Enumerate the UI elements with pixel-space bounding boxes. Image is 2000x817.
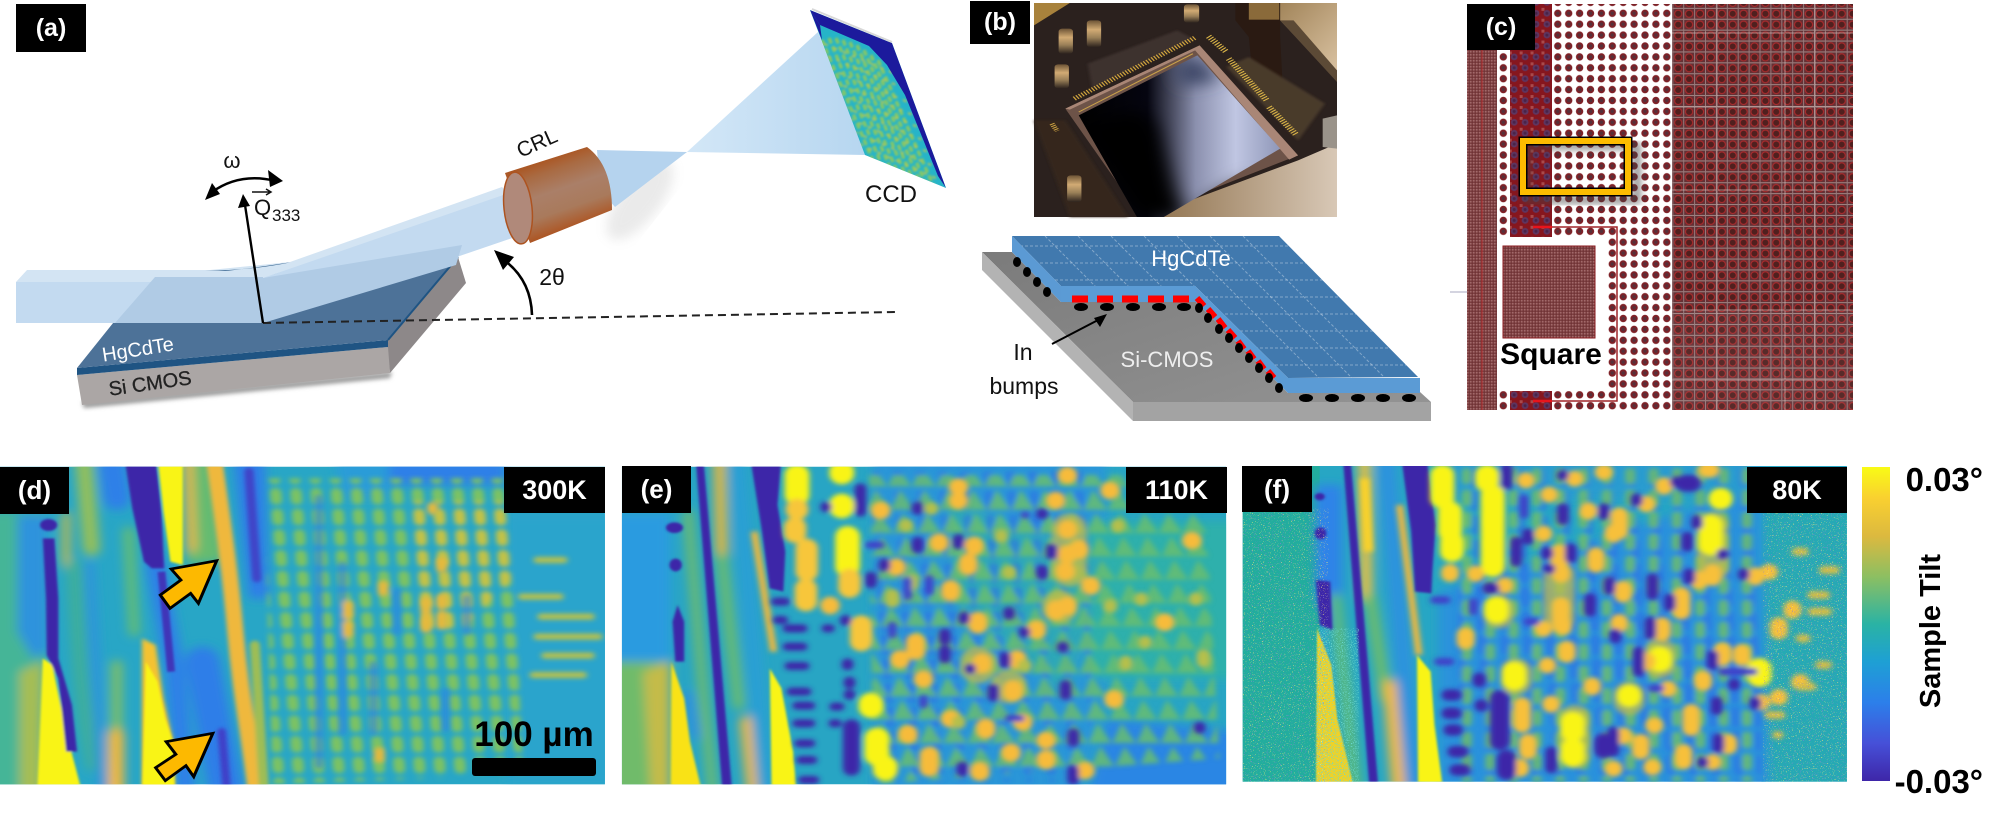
guide line [1450,291,1853,293]
CCD detector [810,9,946,208]
thin trace outline [1533,227,1617,401]
Q vector arrow: 333 [272,206,300,225]
panel c: bump layout [1450,4,1853,410]
panel b: flip-chip diagram [982,236,1431,421]
label (e): (e) [641,474,672,504]
indium bumps [1013,257,1416,402]
label (d) [0,467,69,514]
Q vector arrow: Q [254,195,271,220]
X-ray beam [16,32,866,323]
Si-CMOS substrate: Si-CMOS [1121,347,1213,372]
label (d): (d) [18,475,51,505]
label (f): (f) [1264,474,1290,504]
colorbar labels: Sample Tilt [1915,554,1947,708]
colorbar labels: 0.03° [1906,461,1983,498]
scale bar: 100 µm [472,715,596,776]
panel a: diffraction schematic [16,8,946,410]
red contacts right [1197,298,1274,378]
label 300K [504,467,605,513]
highlight rectangle [1523,141,1637,200]
omega rotation arrow [205,148,283,200]
In bumps callout: In [1013,339,1033,365]
label 300K: 300K [522,474,587,504]
label 110K: 110K [1145,474,1208,504]
panel b: detector photograph [1032,3,1337,219]
colorbar labels: -0.03° [1895,763,1983,800]
left stripes [1315,458,1444,798]
pixel noise [1243,508,1847,782]
label (b): (b) [984,8,1016,36]
hot and cold spots [1435,468,1835,772]
dashed axis [263,312,895,323]
dark and yellow features [37,458,183,798]
label (c): (c) [1486,12,1516,40]
label 80K: 80K [1772,474,1822,504]
label (a) [16,4,86,52]
In bumps callout: bumps [989,373,1059,399]
Q vector arrow [238,189,300,323]
label 110K [1126,467,1227,513]
red contacts [1072,296,1189,302]
map e: 110K tilt map [622,466,1226,784]
left dense stripe [1467,4,1497,410]
two-theta arrow: 2θ [539,264,565,290]
right dense array [1672,4,1853,410]
sample: HgCdTe on Si CMOS [77,257,466,408]
HgCdTe layer: HgCdTe [1151,246,1231,271]
In bumps callout [989,314,1107,399]
left stripes [666,458,797,798]
bump grid [1497,4,1672,410]
label (a): (a) [36,14,66,42]
map d: 300K tilt map [0,466,605,784]
HgCdTe layer [1012,236,1420,393]
scale bar: 100 µm: 100 µm [474,715,594,754]
square block: Square [1500,338,1602,371]
Si-CMOS substrate [982,252,1431,421]
label (e) [622,466,691,513]
CRL lens: CRL [513,124,561,163]
hot and cold spots [776,472,1204,780]
label 80K [1747,467,1847,513]
colorbar [1862,467,1890,781]
omega rotation arrow: ω [223,148,241,173]
label (c) [1467,4,1535,50]
map f: 80K tilt map [1242,466,1847,782]
label (f) [1242,466,1312,512]
colorbar labels [1895,461,1983,800]
bump lattice [265,478,523,784]
sample text: Si CMOS [107,367,193,401]
sample text: HgCdTe [101,333,175,367]
two-theta arrow [494,250,565,315]
yellow arrows [156,561,217,781]
CCD detector: CCD [865,181,917,208]
label (b) [970,1,1030,44]
square block [1500,246,1602,371]
CRL lens [500,124,612,245]
sample text [101,333,193,401]
broad stripes [0,458,622,798]
